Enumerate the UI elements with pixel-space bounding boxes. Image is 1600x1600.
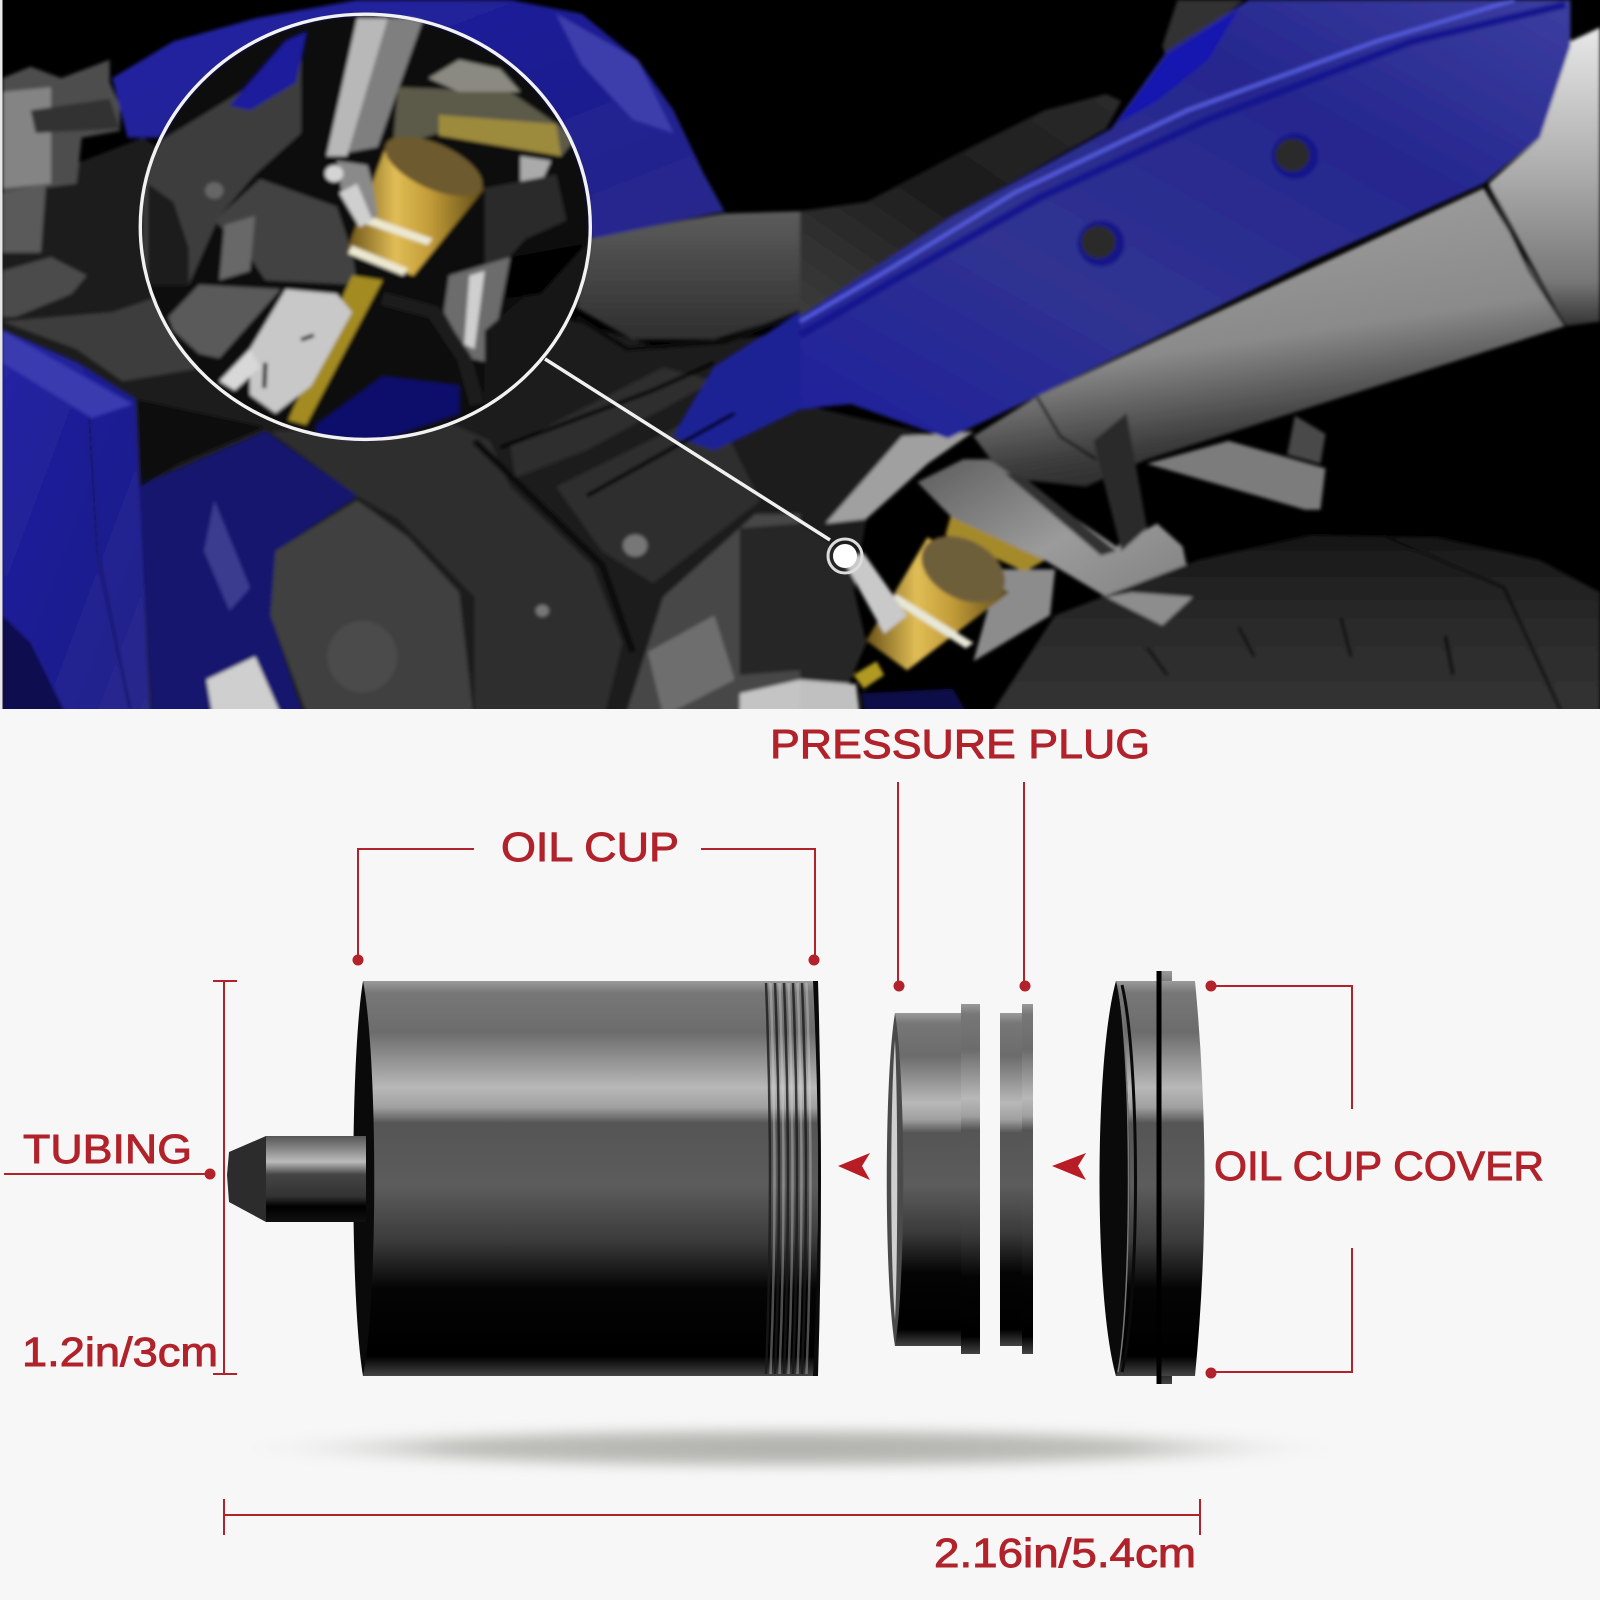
callout anchor dot: [828, 539, 862, 573]
pressure plug leader lines: [894, 782, 1030, 992]
motorcycle illustration: [0, 0, 1600, 726]
oil cup bracket: [352, 849, 820, 966]
callout line: [545, 359, 830, 540]
white left edge of photo: [0, 0, 2, 709]
floor shadow: [220, 1424, 1360, 1472]
arrow: plug into cup: [838, 1153, 870, 1180]
height dimension line: [213, 981, 237, 1374]
label: tubing: TUBING: [23, 1126, 192, 1172]
part: oil cup cover: [1100, 971, 1204, 1384]
oil cup threads: [766, 983, 806, 1374]
motorcycle left half: [0, 0, 800, 726]
label: height dimension: 1.2in/3cm: [22, 1329, 218, 1375]
oil cup cover bracket: [1206, 980, 1352, 1378]
label: width dimension: 2.16in/5.4cm: [934, 1530, 1196, 1576]
tubing leader line: [4, 1168, 216, 1180]
inset magnified view: [138, 9, 597, 445]
part: tubing nipple: [227, 1136, 366, 1222]
arrow: cover into plug: [1052, 1153, 1086, 1180]
part: oil cup body: [353, 981, 821, 1376]
panel: motorcycle photo: [0, 0, 1600, 726]
heading: oil cup: OIL CUP: [501, 824, 679, 870]
heading: pressure plug: PRESSURE PLUG: [770, 721, 1150, 767]
width dimension line: [224, 1499, 1200, 1535]
motorcycle right half: [800, 0, 1600, 726]
inset ring: [140, 14, 590, 439]
label: oil cup cover: OIL CUP COVER: [1214, 1143, 1544, 1189]
part: pressure plug washer: [1000, 1004, 1033, 1354]
oil cup thread highlights: [770, 983, 810, 1374]
part: pressure plug sleeve: [887, 1004, 980, 1354]
